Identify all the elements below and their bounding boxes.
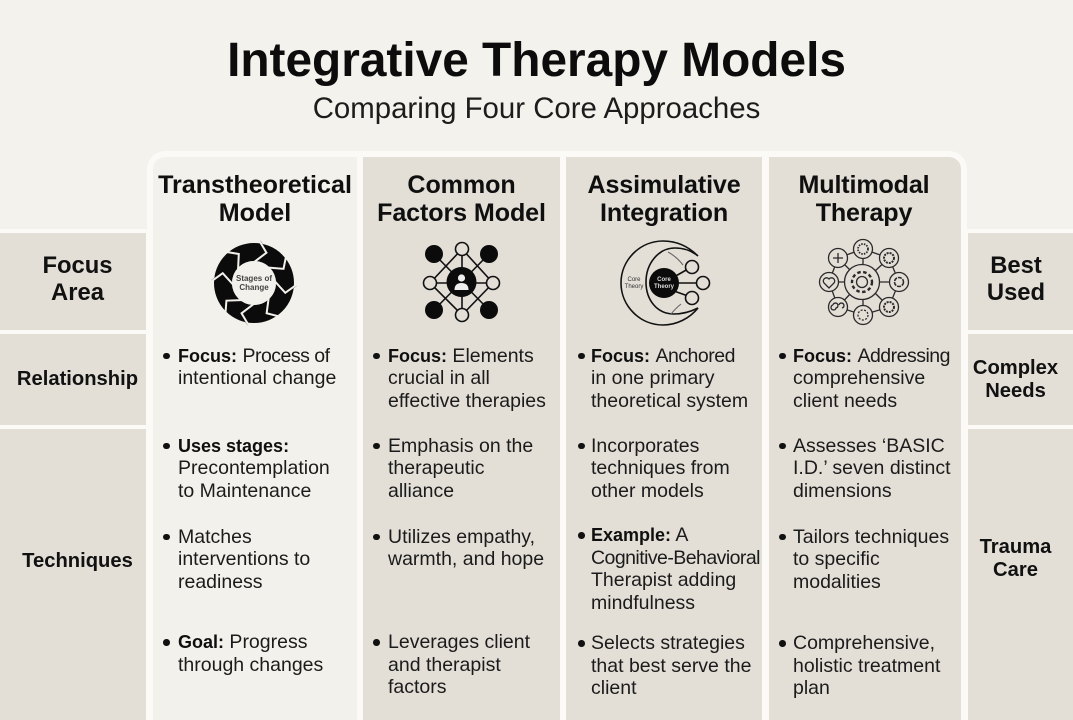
bullet: strategies: Selects strategies (591, 632, 745, 654)
column 3 bullets (578, 344, 760, 699)
heading: Common Factors Model: Factors Model (377, 199, 546, 227)
bullet: focus (578, 344, 748, 412)
bullet: tailors (779, 526, 949, 592)
bullet: goal: Goal: Progress (178, 631, 307, 653)
bullet: strategies: that best serve the (591, 654, 751, 676)
bullet: empathy: warmth, and hope (388, 548, 544, 570)
column 4 bullets (779, 344, 951, 699)
bullet: example (578, 524, 760, 614)
bullet: techniques: Incorporates (591, 434, 699, 456)
column 1 bullets (163, 344, 336, 676)
table frame (147, 151, 967, 720)
bullet: focus: intentional change (178, 367, 336, 389)
bullet: uses stages: to Maintenance (178, 480, 311, 502)
icon: assimulative integration crescent: Theory (625, 284, 643, 290)
bullet: alliance: therapeutic (388, 457, 484, 479)
bullet: BASIC I.D. (779, 434, 951, 502)
label: Complex Needs (973, 357, 1058, 402)
column 2 bullets (373, 344, 546, 698)
bullet: goal: through changes (178, 654, 323, 676)
bullet: matches: readiness (178, 570, 263, 592)
icon: assimulative integration crescent: Core (627, 277, 641, 283)
right header backing (964, 229, 1073, 720)
bullet: alliance: Emphasis on the (388, 434, 533, 456)
bullet: uses stages: Precontemplation (178, 457, 330, 479)
bullet: focus: crucial in all (388, 367, 490, 389)
heading: Assimulative Integration: Assimulative (587, 171, 740, 199)
heading: Assimulative Integration (587, 171, 740, 227)
bullet: focus: effective therapies (388, 390, 546, 412)
bullet: BASIC I.D.: I.D.’ seven distinct (793, 457, 951, 479)
title: Integrative Therapy Models (227, 34, 846, 87)
heading: Common Factors Model: Common (407, 171, 516, 199)
left row header: Techniques (0, 429, 146, 720)
right row header: Trauma Care (968, 429, 1073, 720)
bullet: alliance (373, 434, 533, 502)
bullet: tailors: to specific (793, 548, 880, 570)
bullet: focus: comprehensive (793, 367, 925, 389)
bullet: matches (163, 526, 310, 592)
bullet: focus: Focus: Elements (388, 344, 534, 366)
label: Complex Needs: Complex (973, 357, 1058, 379)
label: Focus Area: Area (51, 279, 104, 306)
left row header: Focus Area (0, 233, 146, 330)
bullet: example: mindfulness (591, 592, 695, 614)
label: Best Used: Best (990, 252, 1042, 279)
bullet: tailors: Tailors techniques (793, 526, 949, 548)
column: Multimodal Therapy (769, 157, 961, 720)
bullet: goal (163, 631, 323, 676)
right row header: Complex Needs (968, 334, 1073, 425)
bullet: plan: holistic treatment (793, 654, 940, 676)
bullet: example: Example: A (591, 524, 688, 546)
subtitle: Comparing Four Core Approaches (313, 92, 760, 125)
heading: Multimodal Therapy: Multimodal (799, 171, 929, 199)
bullet: focus: Focus: Addressing (793, 344, 950, 366)
bullet: BASIC I.D.: dimensions (793, 480, 892, 502)
bullet: techniques: techniques from (591, 457, 730, 479)
label: Complex Needs: Needs (985, 380, 1046, 402)
bullet: focus: Focus: Anchored (591, 344, 735, 366)
bullet: empathy: Utilizes empathy, (388, 526, 535, 548)
bullet: focus (373, 344, 546, 412)
bullet: factors: and therapist (388, 654, 501, 676)
bullet: focus: theoretical system (591, 390, 748, 412)
label: Trauma Care (980, 536, 1052, 581)
bullet: factors (373, 631, 530, 698)
label: Focus Area (42, 252, 113, 306)
bullet: focus (163, 344, 336, 389)
icon: stages of change cycle: Change (239, 283, 269, 292)
bullet: uses stages: Uses stages: (178, 436, 289, 456)
label: Best Used: Used (987, 279, 1045, 306)
heading: Assimulative Integration: Integration (600, 199, 728, 227)
bullet: plan: plan (793, 677, 830, 699)
heading: Common Factors Model (377, 171, 546, 227)
label: Best Used (987, 252, 1045, 306)
label: Relationship: Relationship (17, 368, 138, 390)
bullet: techniques: other models (591, 480, 704, 502)
column: Common Factors Model (363, 157, 560, 720)
heading: Multimodal Therapy: Therapy (816, 199, 912, 227)
column: Assimulative Integration (566, 157, 762, 720)
icon: assimulative integration crescent: Theory (654, 284, 675, 290)
bullet: factors: Leverages client (388, 631, 530, 653)
bullet: uses stages (163, 436, 330, 502)
bullet: empathy (373, 526, 544, 570)
bullet: example: Therapist adding (591, 569, 736, 591)
bullet: focus: Focus: Process of (178, 344, 330, 366)
label: Trauma Care: Trauma (980, 536, 1051, 558)
heading: Multimodal Therapy (799, 171, 929, 227)
bullet: alliance: alliance (388, 480, 454, 502)
bullet: strategies (578, 632, 751, 699)
bullet: focus: in one primary (591, 367, 715, 389)
column: Transtheoretical Model (153, 157, 357, 720)
icon: assimulative integration crescent: Core (657, 277, 671, 283)
bullet: techniques (578, 434, 730, 502)
icon: stages of change cycle: Stages of (236, 274, 272, 283)
bullet: plan: Comprehensive, (793, 632, 935, 654)
bullet: factors: factors (388, 676, 447, 698)
bullet: strategies: client (591, 677, 637, 699)
right row header: Best Used (968, 233, 1073, 330)
bullet: BASIC I.D.: Assesses ‘BASIC (793, 434, 945, 456)
left row header: Relationship (0, 334, 146, 425)
bullet: tailors: modalities (793, 570, 881, 592)
heading: Transtheoretical Model: Transtheoretical (158, 171, 352, 199)
bullet: focus: client needs (793, 390, 897, 412)
bullet: matches: interventions to (178, 548, 310, 570)
label: Techniques: Techniques (22, 550, 133, 572)
bullet: plan (779, 632, 940, 699)
bullet: example: Cognitive-Behavioral (591, 546, 760, 568)
bullet: focus (779, 344, 950, 412)
label: Focus Area: Focus (42, 252, 113, 279)
bullet: matches: Matches (178, 526, 252, 548)
left header backing (0, 229, 150, 720)
heading: Transtheoretical Model (158, 171, 352, 227)
label: Trauma Care: Care (993, 559, 1038, 581)
heading: Transtheoretical Model: Model (219, 199, 291, 227)
